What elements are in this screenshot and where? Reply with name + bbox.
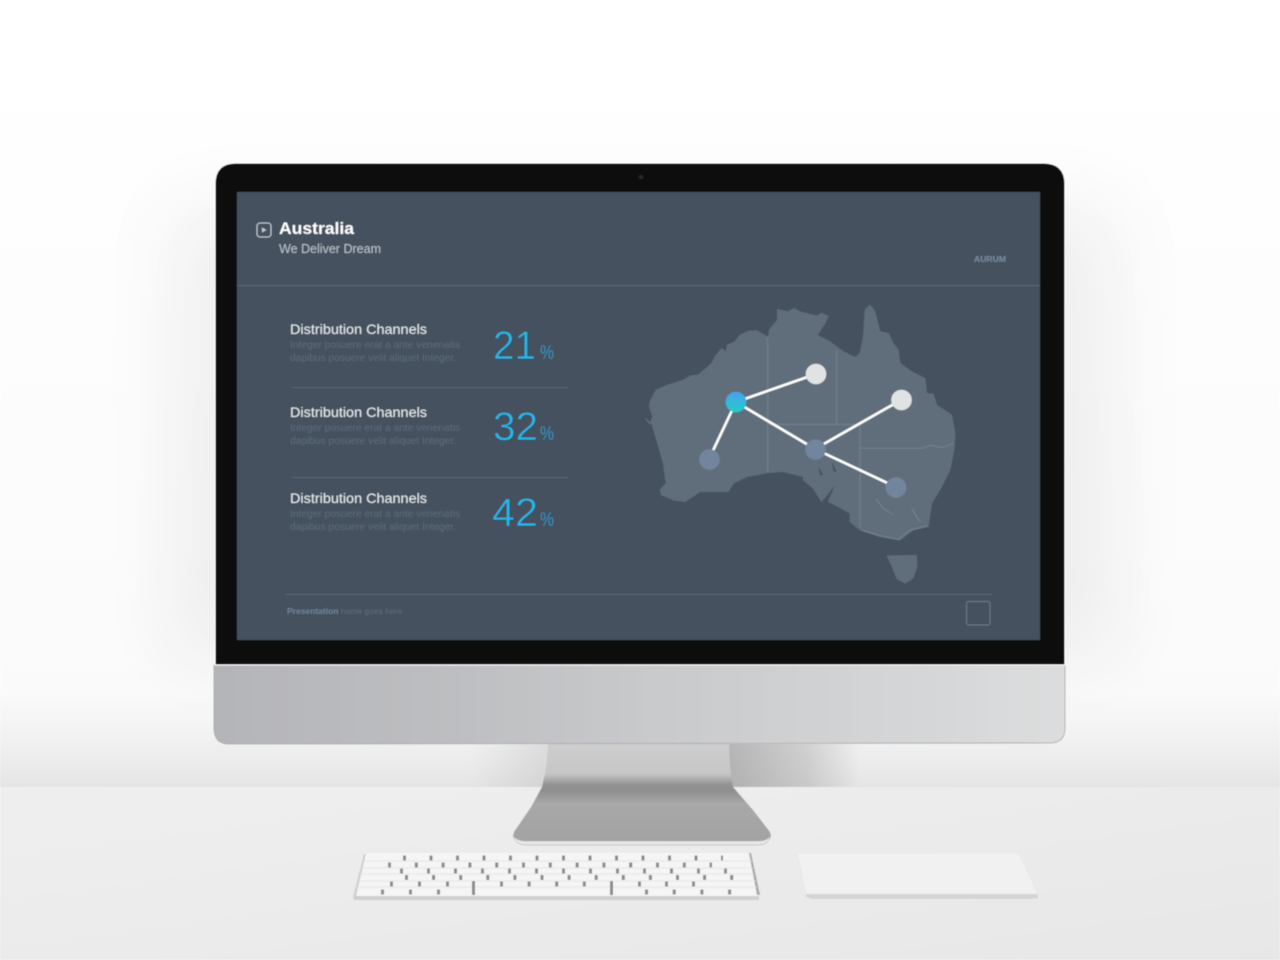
channel row 3 xyxy=(290,490,554,535)
monitor bezel xyxy=(215,163,1065,665)
page number box xyxy=(966,602,990,625)
footer divider xyxy=(285,594,992,596)
channel row 3: 42 xyxy=(492,491,538,535)
network connections xyxy=(709,374,901,487)
channel row 1: Integer posuere erat a ante venenatis xyxy=(290,339,460,351)
subtitle: We Deliver Dream xyxy=(279,241,381,256)
channel row 1 xyxy=(290,321,554,368)
desk surface xyxy=(0,787,1280,960)
brand label: AURUM xyxy=(974,255,1006,264)
monitor stand xyxy=(513,740,771,845)
keyboard xyxy=(353,853,760,900)
channel row 2: dapibus posuere velit aliquet Integer. xyxy=(290,435,456,447)
icon: play box xyxy=(257,223,271,237)
screen panel xyxy=(237,192,1040,640)
ambient glow around monitor xyxy=(170,200,1120,660)
map of Australia xyxy=(645,305,955,584)
network nodes xyxy=(699,364,912,498)
channel row 2: 32 xyxy=(493,405,538,449)
channel row 2 xyxy=(290,404,554,449)
channel row 3: dapibus posuere velit aliquet Integer. xyxy=(290,521,456,533)
channel row 1: 21 xyxy=(493,324,536,368)
title: Australia xyxy=(279,219,355,238)
channel row 3: Integer posuere erat a ante venenatis xyxy=(290,508,460,520)
channel row 1: Distribution Channels xyxy=(290,321,427,337)
channel row 2: Distribution Channels xyxy=(290,404,427,420)
trackpad xyxy=(797,853,1038,899)
channel row 3: % xyxy=(540,509,554,531)
channel row 1: dapibus posuere velit aliquet Integer. xyxy=(290,352,456,364)
channel row 2: Integer posuere erat a ante venenatis xyxy=(290,422,460,434)
channel row 1: % xyxy=(540,342,554,364)
channel row 3: Distribution Channels xyxy=(290,490,427,506)
footer text: Presentation name goes here xyxy=(287,606,403,616)
header divider xyxy=(237,284,1040,286)
stand shadow left xyxy=(470,744,550,787)
webcam xyxy=(639,175,643,179)
monitor chin xyxy=(214,665,1065,744)
channel row 2: % xyxy=(540,423,554,445)
stand shadow right xyxy=(725,744,860,787)
